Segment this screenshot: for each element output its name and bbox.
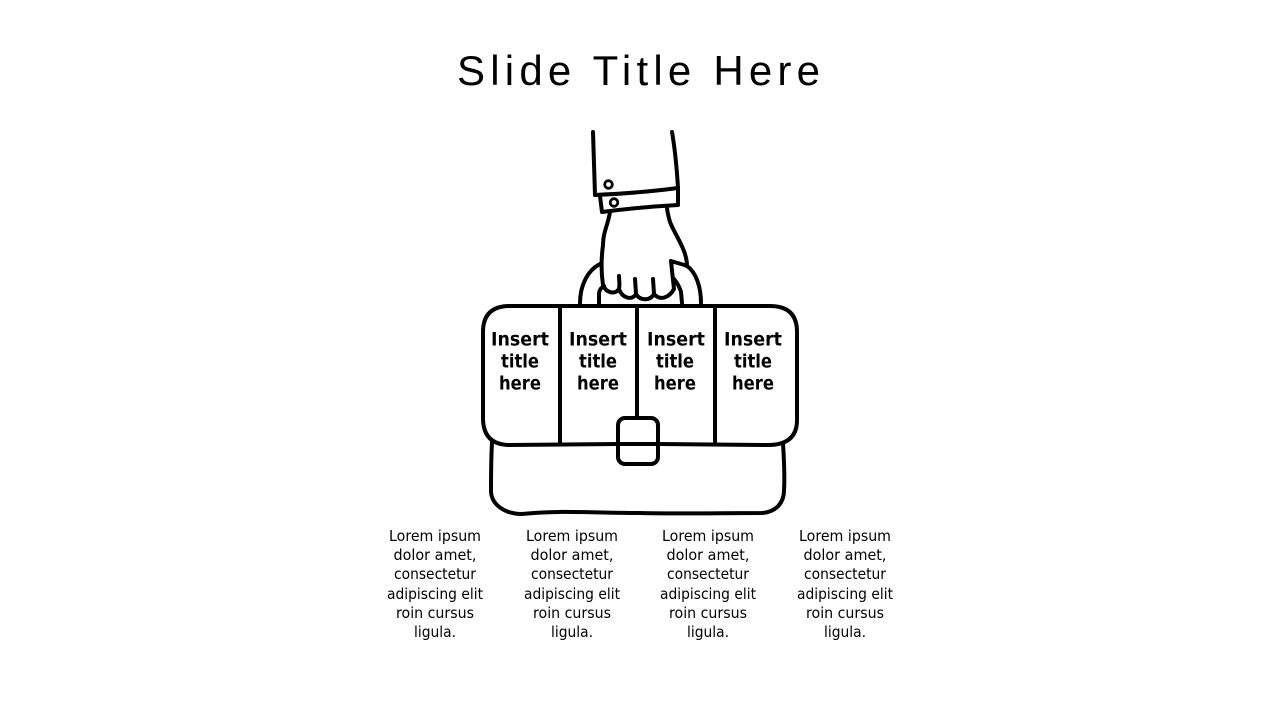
body text: column 4: consectetur bbox=[804, 565, 887, 583]
label: column 1: title bbox=[501, 350, 539, 372]
body text: column 2: adipiscing elit bbox=[524, 585, 620, 603]
label: column 3: here bbox=[654, 372, 696, 394]
body text: column 4: roin cursus bbox=[806, 604, 884, 622]
label: column 2: here bbox=[577, 372, 619, 394]
body text: column 1: Lorem ipsum bbox=[389, 527, 481, 545]
label: column 3: title bbox=[656, 350, 694, 372]
body text: column 2: roin cursus bbox=[533, 604, 611, 622]
icon: flap dividers bbox=[560, 306, 715, 444]
label: column 4: title bbox=[734, 350, 772, 372]
body text: column 1: roin cursus bbox=[396, 604, 474, 622]
body text: column 3: consectetur bbox=[667, 565, 750, 583]
icon: briefcase handle bbox=[580, 264, 701, 303]
icon: hand holding briefcase bbox=[483, 132, 797, 514]
body text: column 4: dolor amet, bbox=[804, 546, 886, 564]
icon: briefcase body bbox=[491, 442, 784, 514]
label: column 4: here bbox=[732, 372, 774, 394]
body text: column 4: ligula. bbox=[824, 623, 866, 641]
label: column 2 bbox=[569, 328, 627, 394]
body text: column 2 bbox=[524, 527, 620, 641]
body text: column 1: adipiscing elit bbox=[387, 585, 483, 603]
body text: column 3 bbox=[660, 527, 756, 641]
body text: column 2: dolor amet, bbox=[530, 546, 614, 564]
label: column 2: title bbox=[579, 350, 617, 372]
body text: column 4 bbox=[797, 527, 893, 641]
label: column 1 bbox=[491, 328, 549, 394]
label: column 1: here bbox=[499, 372, 541, 394]
body text: column 2: Lorem ipsum bbox=[526, 527, 618, 545]
title: Slide Title Here bbox=[457, 47, 820, 94]
icon: clasp bbox=[618, 418, 658, 464]
body text: column 4: adipiscing elit bbox=[797, 585, 893, 603]
body text: column 4: Lorem ipsum bbox=[799, 527, 891, 545]
label: column 4: Insert bbox=[724, 328, 782, 350]
body text: column 1 bbox=[387, 527, 483, 641]
body text: column 3: adipiscing elit bbox=[660, 585, 756, 603]
body text: column 3: roin cursus bbox=[669, 604, 747, 622]
label: column 3: Insert bbox=[647, 328, 705, 350]
body text: column 1: ligula. bbox=[414, 623, 456, 641]
label: column 2: Insert bbox=[569, 328, 627, 350]
icon: briefcase flap bbox=[483, 306, 797, 445]
label: column 1: Insert bbox=[491, 328, 549, 350]
body text: column 2: consectetur bbox=[531, 565, 614, 583]
body text: column 2: ligula. bbox=[551, 623, 593, 641]
label: column 4 bbox=[724, 328, 782, 394]
body text: column 1: dolor amet, bbox=[394, 546, 476, 564]
body text: column 3: Lorem ipsum bbox=[662, 527, 754, 545]
body text: column 1: consectetur bbox=[394, 565, 477, 583]
label: column 3 bbox=[647, 328, 705, 394]
flap labels bbox=[491, 328, 782, 394]
body text: column 3: dolor amet, bbox=[666, 546, 750, 564]
body text: column 3: ligula. bbox=[687, 623, 729, 641]
icon: hand bbox=[602, 207, 687, 299]
icon: jacket sleeve bbox=[593, 132, 678, 212]
